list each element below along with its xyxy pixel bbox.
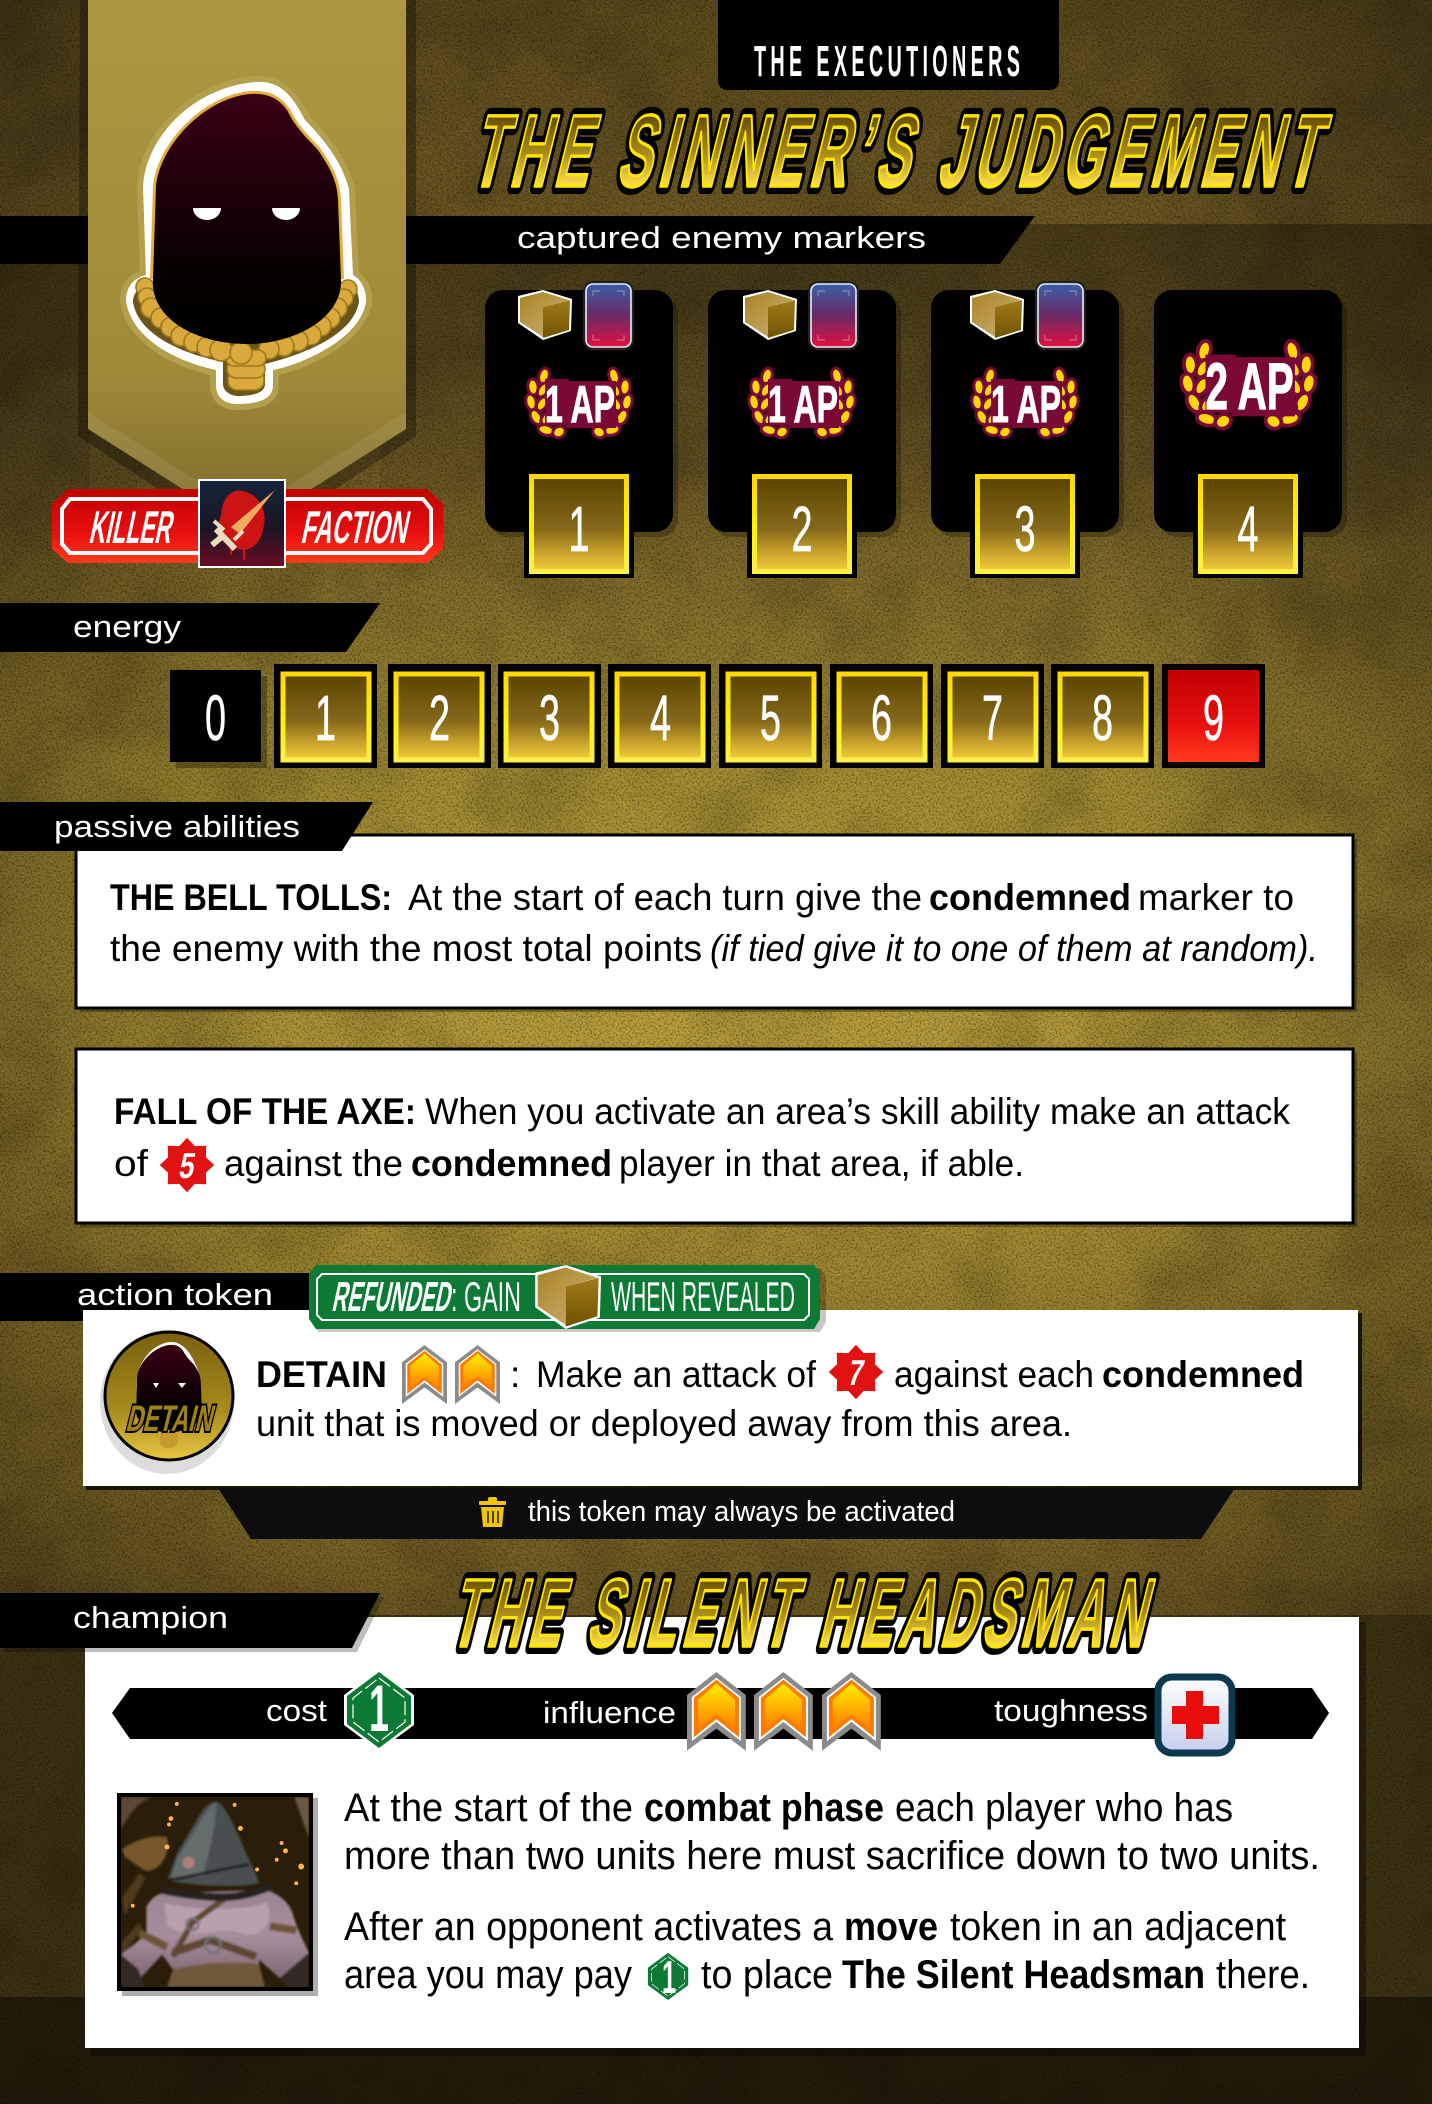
laurel 1 AP <box>526 369 632 438</box>
panel: detain token: unit that is moved or deployed away from this area. <box>256 1403 1072 1444</box>
panel: fall of the axe <box>76 1049 1357 1227</box>
icon: attack 5: 5 <box>176 1145 198 1186</box>
slot 4: 4 <box>1238 493 1258 565</box>
icon: attack 5 <box>159 1137 215 1193</box>
energy 0: 0 <box>205 682 226 754</box>
laurel 1 AP: 1 AP <box>991 376 1061 434</box>
text: champion abilities: to place <box>701 1953 833 1997</box>
panel: the bell tolls <box>76 835 1357 1012</box>
panel: the bell tolls: the enemy with the most total points <box>110 928 702 969</box>
stat bar: influence <box>543 1695 676 1730</box>
icon: cost hex: 1 <box>369 1671 389 1745</box>
stat bar: toughness <box>994 1693 1148 1728</box>
panel: fall of the axe: player in that area, if able. <box>619 1143 1024 1184</box>
slot 4 <box>1193 471 1303 578</box>
icon: influence <box>687 1672 746 1751</box>
section strip: champion <box>0 1593 384 1652</box>
faction banner <box>78 0 416 548</box>
badge: refunded <box>309 1265 826 1332</box>
portrait: silent headsman <box>117 1793 318 1996</box>
text: champion abilities: each player who has <box>895 1786 1233 1830</box>
icon: hooded executioner <box>126 82 366 404</box>
laurel 1 AP <box>972 369 1078 438</box>
slot 3 <box>970 471 1080 578</box>
laurel 2 AP <box>1182 342 1315 429</box>
icon: bloody dagger card <box>199 480 285 567</box>
title: THE SINNER’S JUDGEMENT <box>464 93 1338 208</box>
energy 7 <box>941 664 1044 768</box>
section strip: action token <box>0 1273 320 1321</box>
energy 7: 7 <box>982 682 1003 754</box>
text: champion abilities: After an opponent activates a <box>344 1905 834 1949</box>
section strip: captured enemy markers <box>0 216 1035 264</box>
energy 9 <box>1162 664 1265 768</box>
energy 0 <box>170 670 267 768</box>
tab: faction name <box>718 0 1059 90</box>
energy 1 <box>274 664 377 768</box>
panel: the bell tolls: At the start of each turn give the <box>408 877 922 918</box>
slot 2: 2 <box>792 493 812 565</box>
energy 2: 2 <box>429 682 450 754</box>
icon: cost hex: 1 <box>662 1951 676 2003</box>
icon: cost hex <box>646 1951 690 2003</box>
text: champion abilities: there. <box>1216 1953 1310 1997</box>
panel: fall of the axe: against the <box>224 1143 403 1184</box>
icon: toughness <box>1158 1677 1232 1753</box>
panel: the bell tolls: THE BELL TOLLS: <box>110 877 392 918</box>
panel: detain token <box>83 1310 1362 1490</box>
icon: card <box>1035 281 1086 350</box>
energy 6 <box>830 664 933 768</box>
energy 9: 9 <box>1203 682 1224 754</box>
champion name: THE SILENT HEADSMAN <box>444 1561 1163 1667</box>
icon: trash can <box>479 1497 506 1527</box>
section strip: passive abilities: passive abilities <box>54 809 300 844</box>
energy track <box>170 664 1265 768</box>
text: champion abilities <box>344 1786 1320 2003</box>
icon: influence <box>822 1672 881 1751</box>
slot 3: 3 <box>1014 493 1036 565</box>
panel: detain token: : <box>510 1354 520 1395</box>
icon: cube <box>535 1265 601 1329</box>
section strip: action token: action token <box>77 1277 273 1312</box>
token: detain: DETAIN <box>123 1398 219 1439</box>
icon: card <box>808 281 859 350</box>
section strip: champion: champion <box>73 1600 228 1635</box>
text: champion abilities: more than two units here must sacrifice down to two units. <box>344 1834 1320 1878</box>
panel: fall of the axe: condemned <box>411 1143 612 1184</box>
badge: killer faction <box>52 480 443 567</box>
text: champion abilities: The Silent Headsman <box>842 1953 1205 1997</box>
energy 8: 8 <box>1092 682 1113 754</box>
text: champion abilities: At the start of the <box>344 1786 633 1830</box>
laurel 1 AP: 1 AP <box>545 376 615 434</box>
stat bar: cost <box>266 1693 327 1728</box>
text: champion abilities: combat phase <box>644 1786 884 1830</box>
energy 6: 6 <box>871 682 892 754</box>
energy 5: 5 <box>760 682 781 754</box>
token: detain <box>100 1330 234 1474</box>
panel: the bell tolls: (if tied give it to one of them at random). <box>710 928 1318 969</box>
icon: cube <box>970 290 1024 340</box>
badge: killer faction: FACTION <box>298 501 415 553</box>
icon: influence <box>754 1672 813 1751</box>
panel: fall of the axe: When you activate an area’s skill ability make an attack <box>425 1091 1290 1132</box>
section strip: captured enemy markers: captured enemy markers <box>517 220 926 255</box>
title: THE SINNER’S JUDGEMENT <box>464 93 1338 208</box>
section strip: energy: energy <box>73 609 182 644</box>
energy 4: 4 <box>650 682 671 754</box>
text: champion abilities: move <box>844 1905 938 1949</box>
icon: cube <box>518 290 572 340</box>
text: champion abilities: area you may pay <box>344 1953 632 1997</box>
icon: influence <box>455 1345 500 1404</box>
panel: detain token: DETAIN <box>256 1354 387 1395</box>
energy 1: 1 <box>315 682 336 754</box>
stat bar <box>112 1669 1329 1753</box>
laurel 2 AP: 2 AP <box>1205 350 1294 423</box>
icon: cube <box>743 290 797 340</box>
energy 3 <box>498 664 601 768</box>
marker panel 2 <box>708 281 901 578</box>
energy 8 <box>1051 664 1154 768</box>
marker panel 4 <box>1154 290 1347 578</box>
icon: attack 7 <box>828 1344 884 1400</box>
icon: attack 7: 7 <box>845 1352 867 1393</box>
energy 5 <box>719 664 822 768</box>
section strip: energy <box>0 603 380 652</box>
panel: detain token: against each <box>894 1354 1094 1395</box>
tab: faction name: THE EXECUTIONERS <box>754 37 1020 86</box>
slot 1: 1 <box>568 493 590 565</box>
energy 3: 3 <box>539 682 560 754</box>
laurel 1 AP <box>749 369 855 438</box>
panel: detain token: Make an attack of <box>536 1354 817 1395</box>
champion name: THE SILENT HEADSMAN <box>444 1561 1163 1667</box>
energy 2 <box>388 664 491 768</box>
laurel 1 AP: 1 AP <box>768 376 838 434</box>
badge: refunded: REFUNDED <box>329 1273 457 1320</box>
badge: refunded: WHEN REVEALED <box>611 1273 795 1320</box>
strip: always activated: this token may always be activated <box>528 1496 955 1528</box>
panel: champion <box>85 1617 1366 2056</box>
text: champion abilities: token in an adjacent <box>950 1905 1286 1949</box>
slot 1 <box>524 471 634 578</box>
panel: fall of the axe: of <box>114 1143 149 1184</box>
icon: card <box>583 281 634 350</box>
panel: the bell tolls: condemned <box>929 877 1131 918</box>
strip: always activated <box>218 1488 1235 1539</box>
section strip: passive abilities <box>0 802 373 851</box>
marker panel 1 <box>485 281 678 578</box>
icon: cost hex <box>344 1669 414 1751</box>
marker panel 3 <box>931 281 1124 578</box>
energy 4 <box>608 664 711 768</box>
badge: killer faction: KILLER <box>86 501 179 553</box>
badge: refunded: : GAIN <box>451 1273 521 1320</box>
panel: detain token: condemned <box>1102 1354 1304 1395</box>
panel: fall of the axe: FALL OF THE AXE: <box>114 1091 416 1132</box>
panel: the bell tolls: marker to <box>1138 877 1294 918</box>
slot 2 <box>747 471 857 578</box>
icon: influence <box>402 1345 447 1404</box>
